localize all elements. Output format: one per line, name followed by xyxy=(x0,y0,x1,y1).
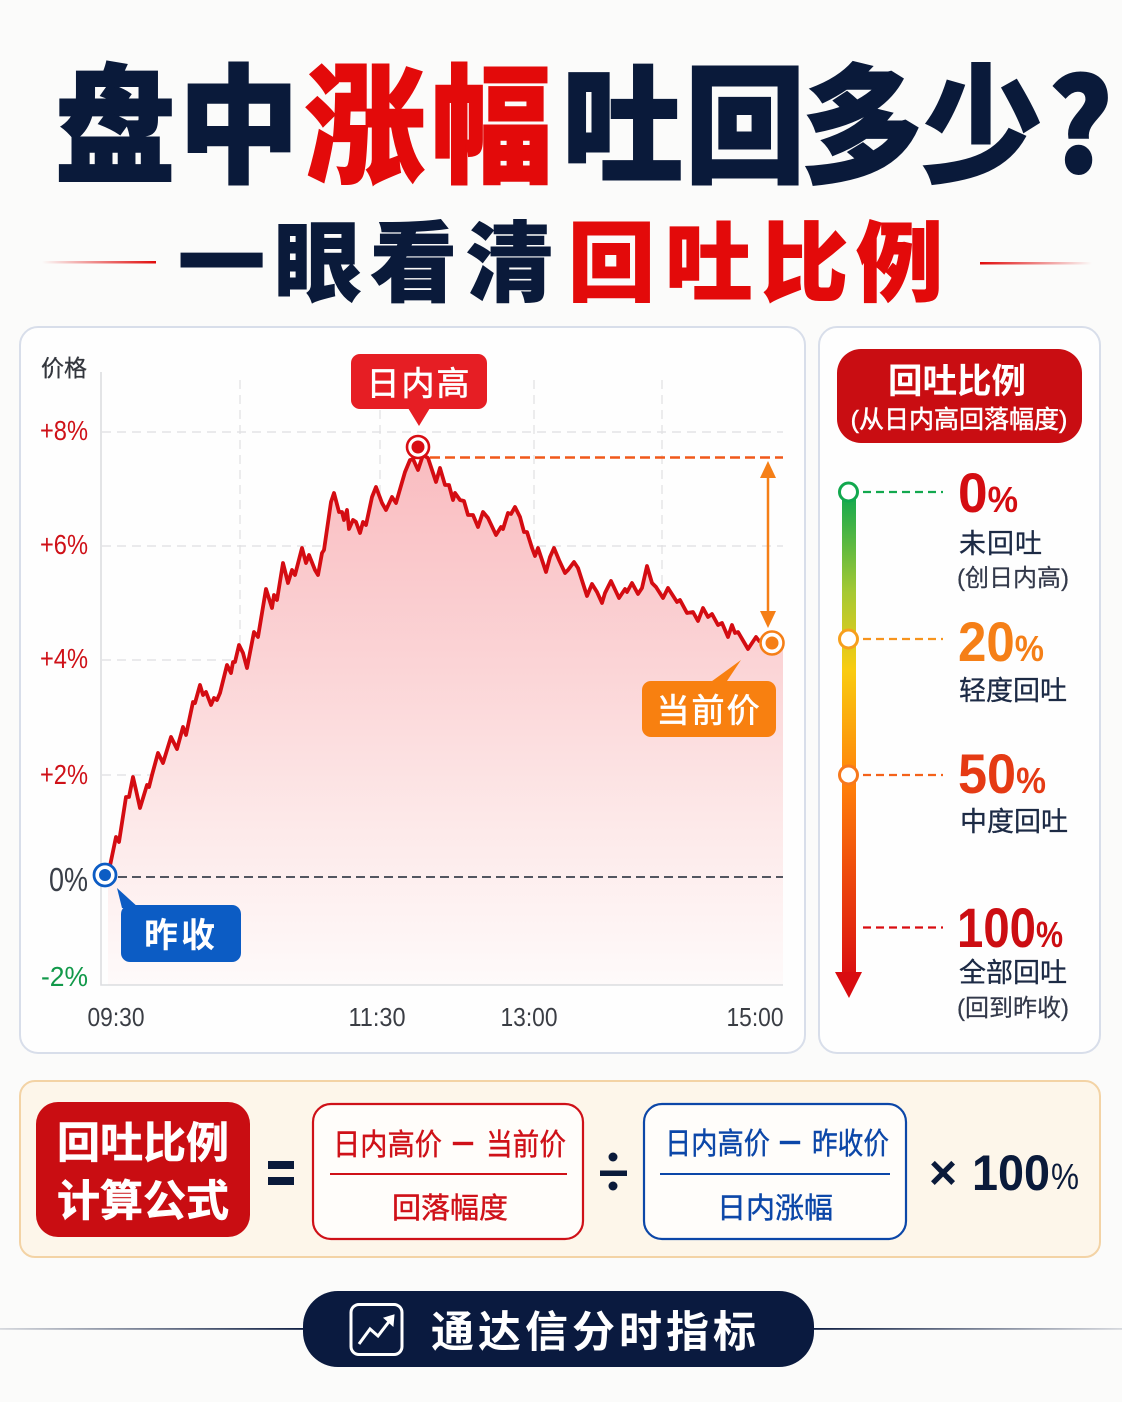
icon: trend chart xyxy=(351,1304,402,1354)
footer badge xyxy=(303,1291,814,1367)
callout: previous close: 昨收 xyxy=(144,908,218,957)
level 0% xyxy=(957,461,1069,592)
level 100% xyxy=(957,896,1069,1022)
times 100 percent: % xyxy=(1051,1156,1079,1197)
level 0%: (创日内高) xyxy=(957,565,1069,592)
panel: formula xyxy=(20,1081,1100,1257)
callout: current price: 当前价 xyxy=(656,684,762,732)
panel: price chart xyxy=(20,327,805,1053)
formula label xyxy=(36,1102,250,1237)
level 100%: (回到昨收) xyxy=(957,995,1069,1022)
x axis labels: 13:00 xyxy=(500,1002,558,1032)
callout: intraday high xyxy=(351,354,487,426)
level 100%: 全部回吐 xyxy=(959,951,1067,990)
x axis labels: 11:30 xyxy=(348,1002,406,1032)
title: 盘中 xyxy=(55,24,299,209)
times 100 percent: × xyxy=(929,1147,957,1200)
footer text: 通达信分时指标 xyxy=(431,1298,760,1360)
x axis labels: 09:30 xyxy=(88,1002,144,1032)
denominator box: intraday gain: 昨收价 xyxy=(812,1119,889,1163)
high level dashed line xyxy=(430,456,783,459)
y axis labels: +4% xyxy=(40,643,88,674)
equals sign xyxy=(268,1161,294,1185)
chart axes xyxy=(101,372,783,985)
level 50% xyxy=(958,742,1068,839)
marker: intraday high xyxy=(407,436,429,458)
title xyxy=(55,24,1113,209)
numerator box: retracement: 回落幅度 xyxy=(392,1185,508,1227)
level 50%: 中度回吐 xyxy=(960,800,1068,839)
level 0%: 0% xyxy=(958,461,1018,524)
callout: previous close xyxy=(117,888,241,962)
panel: retracement scale xyxy=(819,327,1100,1053)
marker: current price xyxy=(760,632,784,654)
scale markers xyxy=(840,483,858,784)
title: 涨幅 xyxy=(305,24,552,209)
y axis labels: +2% xyxy=(40,759,88,790)
intraday price line xyxy=(108,455,760,875)
x axis labels: 15:00 xyxy=(726,1002,784,1032)
zero baseline xyxy=(118,876,783,878)
y axis labels: -2% xyxy=(41,961,88,992)
times 100 percent xyxy=(929,1145,1079,1201)
title: 吐回多少? xyxy=(562,24,1113,209)
chart grid xyxy=(102,380,783,985)
level 0%: 未回吐 xyxy=(959,522,1043,561)
numerator box: retracement: 日内高价 xyxy=(333,1120,442,1164)
denominator box: intraday gain: 日内涨幅 xyxy=(717,1185,833,1227)
gradient arrow xyxy=(835,495,862,998)
y axis title: 价格 xyxy=(41,349,87,383)
level 50%: 50% xyxy=(958,742,1046,805)
subtitle: 一眼看清 xyxy=(178,194,553,320)
numerator box: retracement xyxy=(313,1104,583,1239)
callout: current price xyxy=(642,660,776,737)
scale dashed leaders xyxy=(863,492,943,928)
double arrow: retracement span xyxy=(760,461,776,628)
scale heading: (从日内高回落幅度) xyxy=(851,406,1067,434)
area fill xyxy=(108,455,783,985)
callout: intraday high: 日内高 xyxy=(366,357,472,405)
y axis labels: +8% xyxy=(40,415,88,446)
marker: previous close xyxy=(94,864,116,886)
scale heading: 回吐比例 xyxy=(888,353,1026,403)
divide sign xyxy=(600,1152,627,1190)
denominator box: intraday gain: 日内高价 xyxy=(665,1119,770,1163)
scale heading xyxy=(837,349,1082,443)
footer rules xyxy=(0,1328,1122,1330)
formula label: 回吐比例 xyxy=(57,1109,229,1171)
y axis labels: 0% xyxy=(49,861,88,898)
y axis labels: +6% xyxy=(40,529,88,560)
subtitle: 回吐比例 xyxy=(568,194,943,320)
denominator box: intraday gain xyxy=(644,1104,906,1239)
times 100 percent: 100 xyxy=(972,1145,1050,1201)
level 20%: 20% xyxy=(958,610,1044,673)
level 100%: 100% xyxy=(957,896,1063,959)
formula label: 计算公式 xyxy=(57,1167,229,1229)
subtitle xyxy=(42,194,1092,320)
level 20% xyxy=(958,610,1067,708)
y axis labels xyxy=(40,415,88,992)
level 20%: 轻度回吐 xyxy=(959,669,1067,708)
x axis labels xyxy=(88,1002,784,1032)
numerator box: retracement: 当前价 xyxy=(486,1120,566,1164)
